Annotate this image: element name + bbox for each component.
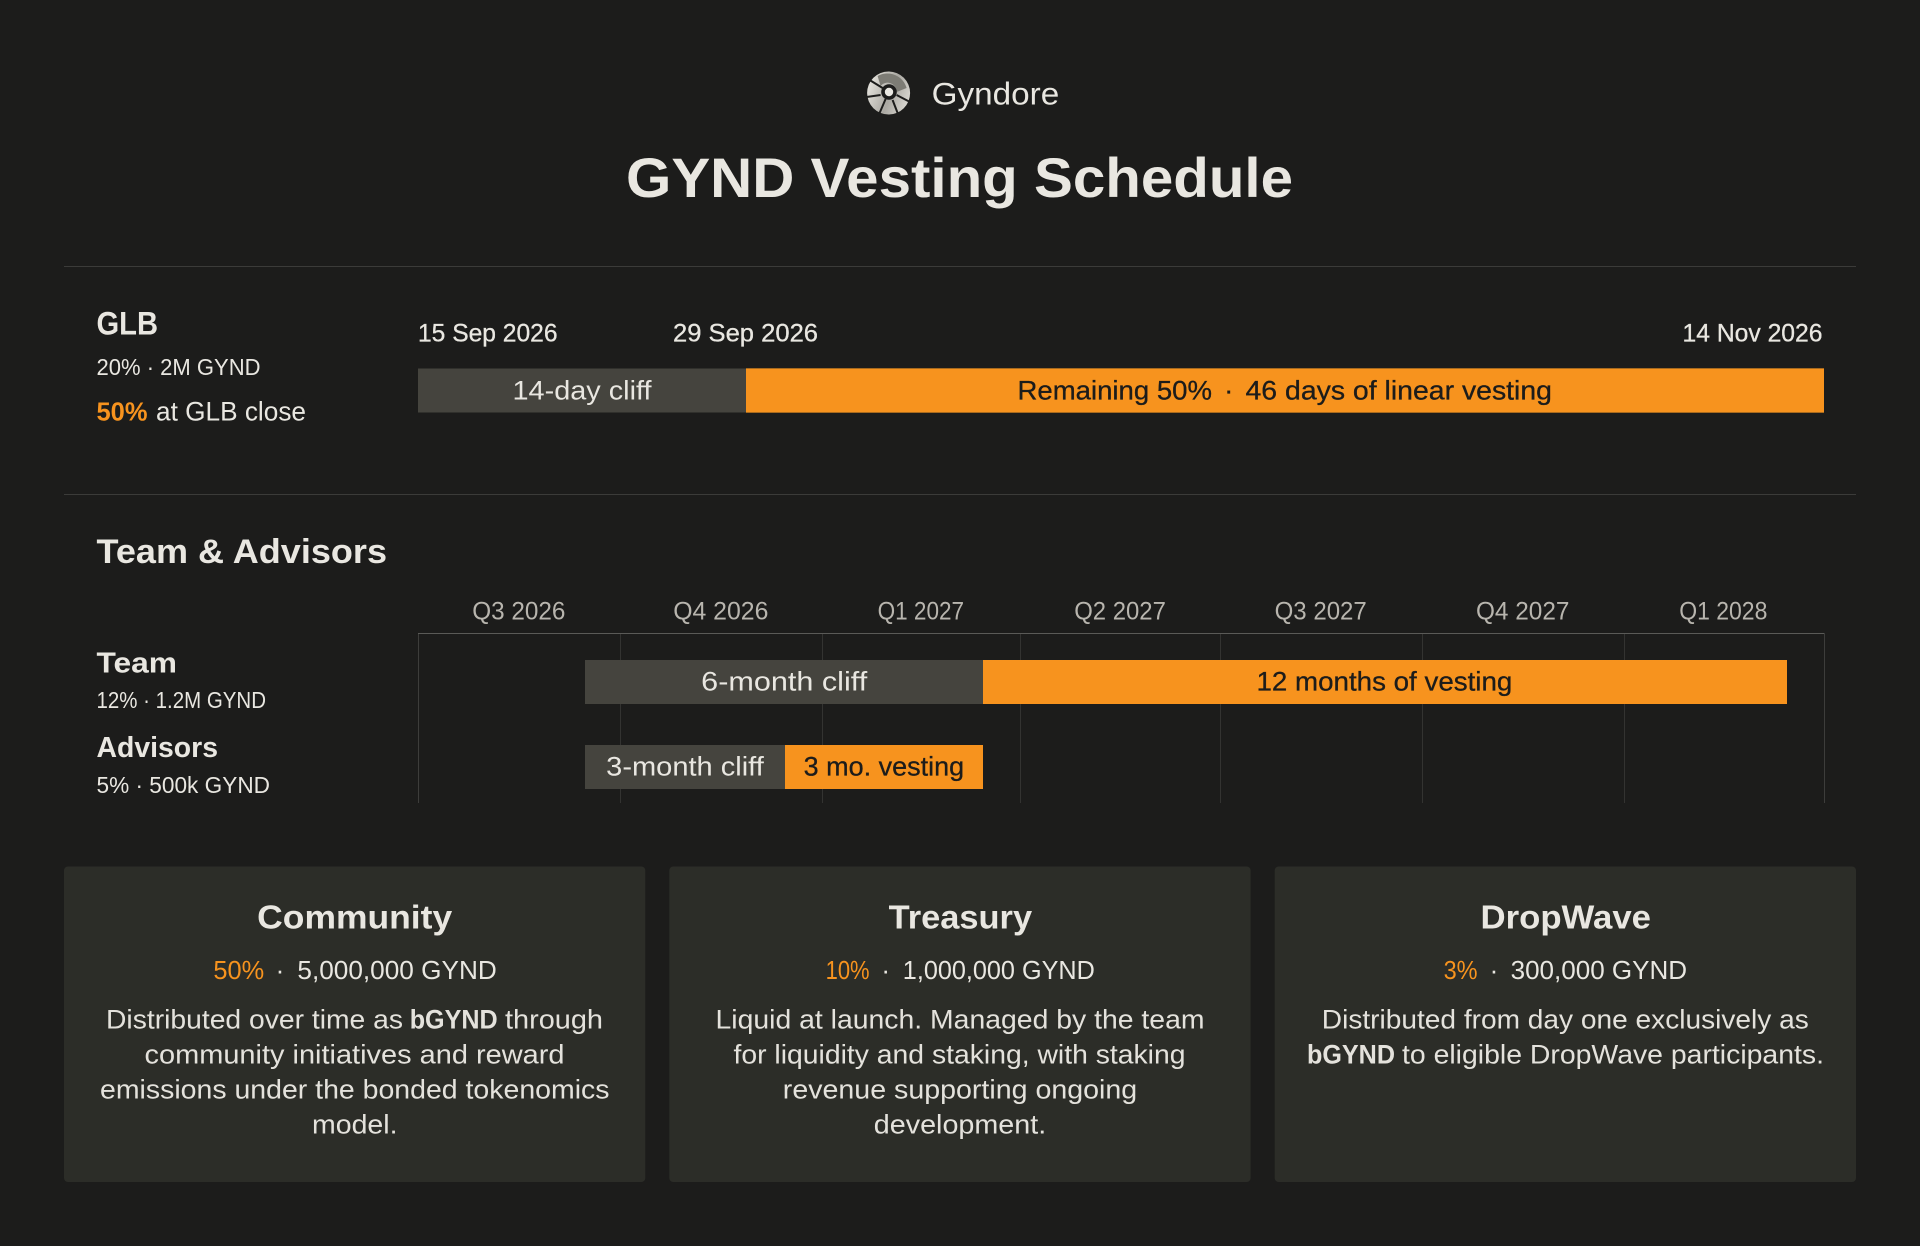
GLB timeline bar: 14-day cliff <box>512 375 652 405</box>
GLB timeline bar: · <box>1224 375 1233 405</box>
GLB timeline bar: 46 days of linear vesting <box>1246 375 1552 405</box>
allocation <box>826 955 1095 985</box>
Team bar <box>585 660 1787 704</box>
description: Liquid at launch. Managed by the team <box>716 1005 1204 1035</box>
row label: Advisors: Advisors <box>96 732 218 764</box>
Advisors bar: 3-month cliff <box>606 752 764 782</box>
allocation: 3% <box>1444 955 1478 985</box>
description: development. <box>874 1110 1046 1140</box>
GLB label <box>96 305 306 426</box>
Advisors bar: 3 mo. vesting <box>804 752 964 782</box>
description: for liquidity and staking, with staking <box>734 1040 1186 1070</box>
description: bGYND <box>410 1005 498 1035</box>
description: Distributed from day one exclusively as <box>1322 1005 1809 1035</box>
allocation: 5,000,000 GYND <box>297 955 497 985</box>
brand name: Gyndore <box>932 76 1059 112</box>
description: community initiatives and reward <box>144 1040 564 1070</box>
GLB label: 20% · 2M GYND <box>96 354 260 380</box>
quarter axis labels: Q3 2026 <box>472 597 565 625</box>
section heading: Team & Advisors <box>96 533 387 571</box>
Team bar: 6-month cliff <box>701 666 868 696</box>
row label: Team: Team <box>96 648 177 680</box>
GLB label: 50% <box>96 396 148 426</box>
card heading: Community <box>257 898 453 936</box>
allocation <box>213 955 497 985</box>
GLB timeline bar: Remaining 50% <box>1018 375 1212 405</box>
GLB label: at GLB close <box>156 396 306 426</box>
description: revenue supporting ongoing <box>783 1075 1137 1105</box>
description: to eligible DropWave participants. <box>1402 1040 1824 1070</box>
panel: DropWave <box>1275 866 1856 1182</box>
GLB dates: 15 Sep 2026 <box>418 320 558 348</box>
GLB dates: 29 Sep 2026 <box>673 320 818 348</box>
description: bGYND <box>1307 1040 1395 1070</box>
quarter axis labels: Q2 2027 <box>1074 597 1166 625</box>
section: GLB <box>96 305 1824 426</box>
description <box>716 1005 1204 1140</box>
title: GYND Vesting Schedule <box>626 146 1293 209</box>
allocation: · <box>881 955 890 985</box>
description: through <box>505 1005 603 1035</box>
description: Distributed over time as <box>106 1005 403 1035</box>
description: emissions under the bonded tokenomics <box>100 1075 610 1105</box>
card heading: Treasury <box>889 898 1033 936</box>
quarter axis labels <box>472 597 1767 625</box>
Team bar: 12 months of vesting <box>1256 666 1512 696</box>
section: Team and Advisors <box>96 533 1825 803</box>
Advisors bar <box>585 745 983 789</box>
GLB label: GLB <box>96 305 158 341</box>
panel: Community <box>64 866 645 1182</box>
row label: Advisors: 5% · 500k GYND <box>96 772 270 798</box>
card heading: DropWave <box>1480 898 1651 936</box>
quarter axis labels: Q1 2027 <box>878 597 964 625</box>
allocation: 300,000 GYND <box>1511 955 1687 985</box>
GLB dates: 14 Nov 2026 <box>1682 320 1822 348</box>
allocation: 50% <box>213 955 264 985</box>
GLB dates <box>418 320 1822 348</box>
description <box>100 1005 610 1140</box>
header <box>626 72 1293 209</box>
row label: Team: 12% · 1.2M GYND <box>96 687 266 713</box>
icon: Gyndore logo <box>867 72 910 114</box>
description: model. <box>312 1110 398 1140</box>
allocation: 10% <box>826 955 870 985</box>
quarter axis labels: Q3 2027 <box>1275 597 1367 625</box>
row label: Team <box>96 648 266 713</box>
quarter axis labels: Q1 2028 <box>1679 597 1767 625</box>
quarter axis labels: Q4 2026 <box>673 597 768 625</box>
allocation: 1,000,000 GYND <box>903 955 1095 985</box>
GLB timeline bar <box>418 368 1824 413</box>
allocation: · <box>276 955 284 985</box>
panel: Treasury <box>669 866 1251 1182</box>
allocation: · <box>1490 955 1498 985</box>
description <box>1307 1005 1824 1070</box>
row label: Advisors <box>96 732 270 798</box>
quarter axis labels: Q4 2027 <box>1476 597 1569 625</box>
